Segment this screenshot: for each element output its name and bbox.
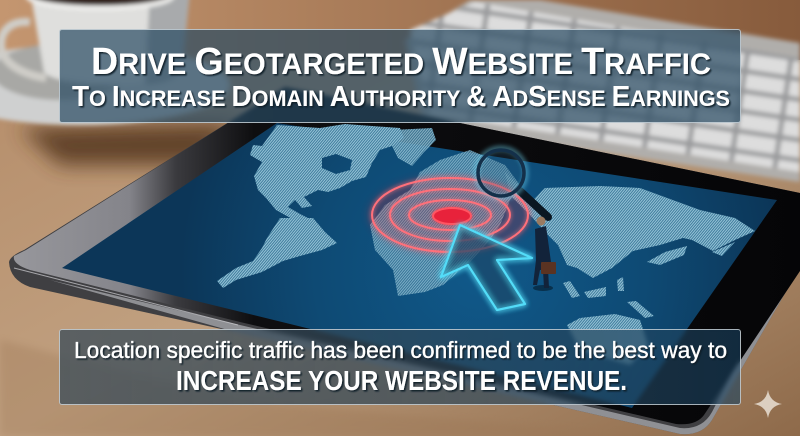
- tablet screen with world map: [62, 123, 777, 408]
- message line 1: Location specific traffic has been confirmed to be the best way to: [74, 337, 727, 363]
- glowing cursor arrow: [441, 225, 532, 310]
- map: Europe and Africa: [370, 150, 520, 296]
- bottom message banner: [59, 329, 741, 405]
- map: Asia: [505, 172, 755, 278]
- message line 2: INCREASE YOUR WEBSITE REVENUE.: [176, 365, 627, 396]
- magnifying glass: [476, 148, 548, 217]
- red target rings: [368, 175, 532, 255]
- sparkle watermark: [754, 390, 782, 418]
- map: South America: [217, 218, 337, 288]
- map: Greenland: [392, 128, 436, 166]
- map: southeast Asia islands: [563, 277, 654, 318]
- miniature businessman with briefcase: [533, 216, 556, 291]
- map: Kamchatka: [712, 242, 735, 256]
- title line 1: DRIVE GEOTARGETED WEBSITE TRAFFIC: [91, 41, 711, 83]
- blurred keyboard: [405, 0, 800, 182]
- title line 2: TO INCREASE DOMAIN AUTHORITY & ADSENSE EARNINGS: [72, 81, 730, 113]
- map: Australia: [567, 314, 648, 365]
- map: North America: [250, 124, 404, 220]
- headline banner: [59, 29, 741, 123]
- coffee cup and saucer: [0, 0, 240, 165]
- map: Japan: [647, 246, 687, 265]
